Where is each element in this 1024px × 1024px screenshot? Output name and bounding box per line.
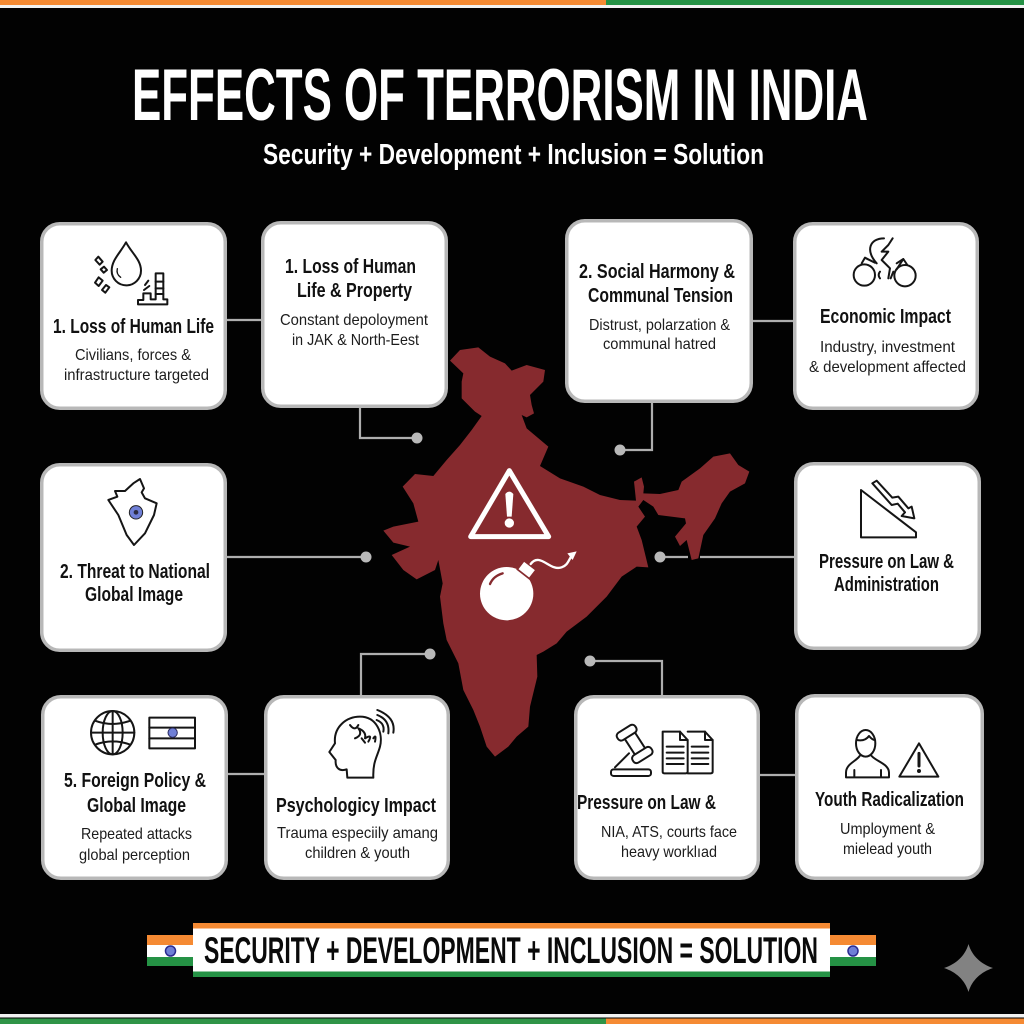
connector lines and dots [227,320,795,775]
panel: economic impact: & development affected [809,359,966,376]
panel: foreign policy: Global Image [87,794,186,817]
icon: right flag [830,935,876,966]
solution banner [193,923,830,977]
map silhouette [383,347,749,757]
icon: person and warning [846,730,938,777]
top tricolour bar [0,0,1024,8]
icon: drop and rubble [95,242,167,304]
icon: head with sound waves [329,710,394,778]
india map with warning and bomb [383,347,749,757]
panel: pressure on law and administration [796,464,979,648]
panel: economic impact: Industry, investment [820,339,956,356]
panel: foreign policy [43,697,226,878]
subtitle: Security + Development + Inclusion = Solution [263,139,764,171]
panel: pressure on law: Pressure on Law & [577,791,716,814]
panel: loss of human life and property: in JAK & North-Eest [292,332,419,349]
panel: youth radicalization: Youth Radicalization [815,788,964,811]
panel: economic impact: Economic Impact [820,305,951,328]
panel: economic impact [795,224,977,408]
panel: social harmony [567,221,751,401]
panel: foreign policy: global perception [79,847,190,864]
icon: broken cycle [854,238,916,286]
panel: pressure on law: NIA, ATS, courts face [601,824,737,841]
panel: psychology impact: children & youth [305,845,410,862]
icon: falling slope arrow [861,481,916,537]
icon: left flag [147,935,193,966]
icon: bomb [480,551,577,620]
panel: loss of human life and property: 1. Loss of Human [285,255,416,278]
panel: pressure on law and administration: Administration [834,573,939,596]
panel: threat to national image [42,465,225,650]
panel: youth radicalization [797,696,982,878]
panel: loss of human life [42,224,225,408]
panel: loss of human life and property: Constant depoloyment [280,312,429,329]
panel: loss of human life and property: Life & Property [297,279,412,302]
panel: foreign policy: Repeated attacks [81,826,192,843]
panel: social harmony: Distrust, polarzation & [589,317,730,334]
panel: loss of human life: Civilians, forces & [75,347,191,364]
icon: gavel and documents [611,723,713,776]
panel: social harmony: 2. Social Harmony & [579,260,735,283]
panel: pressure on law and administration: Pressure on Law & [819,550,954,573]
panel: pressure on law: heavy worklıad [621,844,717,861]
icon: india outline with marker [108,479,157,545]
bottom tricolour bar [0,1014,1024,1024]
icon: globe and flag [91,711,195,754]
panel: threat to national image: 2. Threat to National [60,560,210,583]
icon: sparkle star [944,944,993,992]
panel: foreign policy: 5. Foreign Policy & [64,769,206,792]
panel: psychology impact: Trauma especiily amang [277,825,438,842]
panel: social harmony: Communal Tension [588,284,733,307]
panel: social harmony: communal hatred [603,336,716,353]
panel: youth radicalization: Umployment & [840,821,935,838]
panel: loss of human life: 1. Loss of Human Life [53,315,214,338]
panel: psychology impact [266,697,448,878]
panel: threat to national image: Global Image [85,583,183,606]
panel: loss of human life: infrastructure targeted [64,367,209,384]
panel: loss of human life and property [263,223,446,406]
panel: youth radicalization: mielead youth [843,841,932,858]
icon: warning triangle [471,471,549,537]
panel: psychology impact: Psychologicy Impact [276,794,436,817]
panel: pressure on law [576,697,758,878]
